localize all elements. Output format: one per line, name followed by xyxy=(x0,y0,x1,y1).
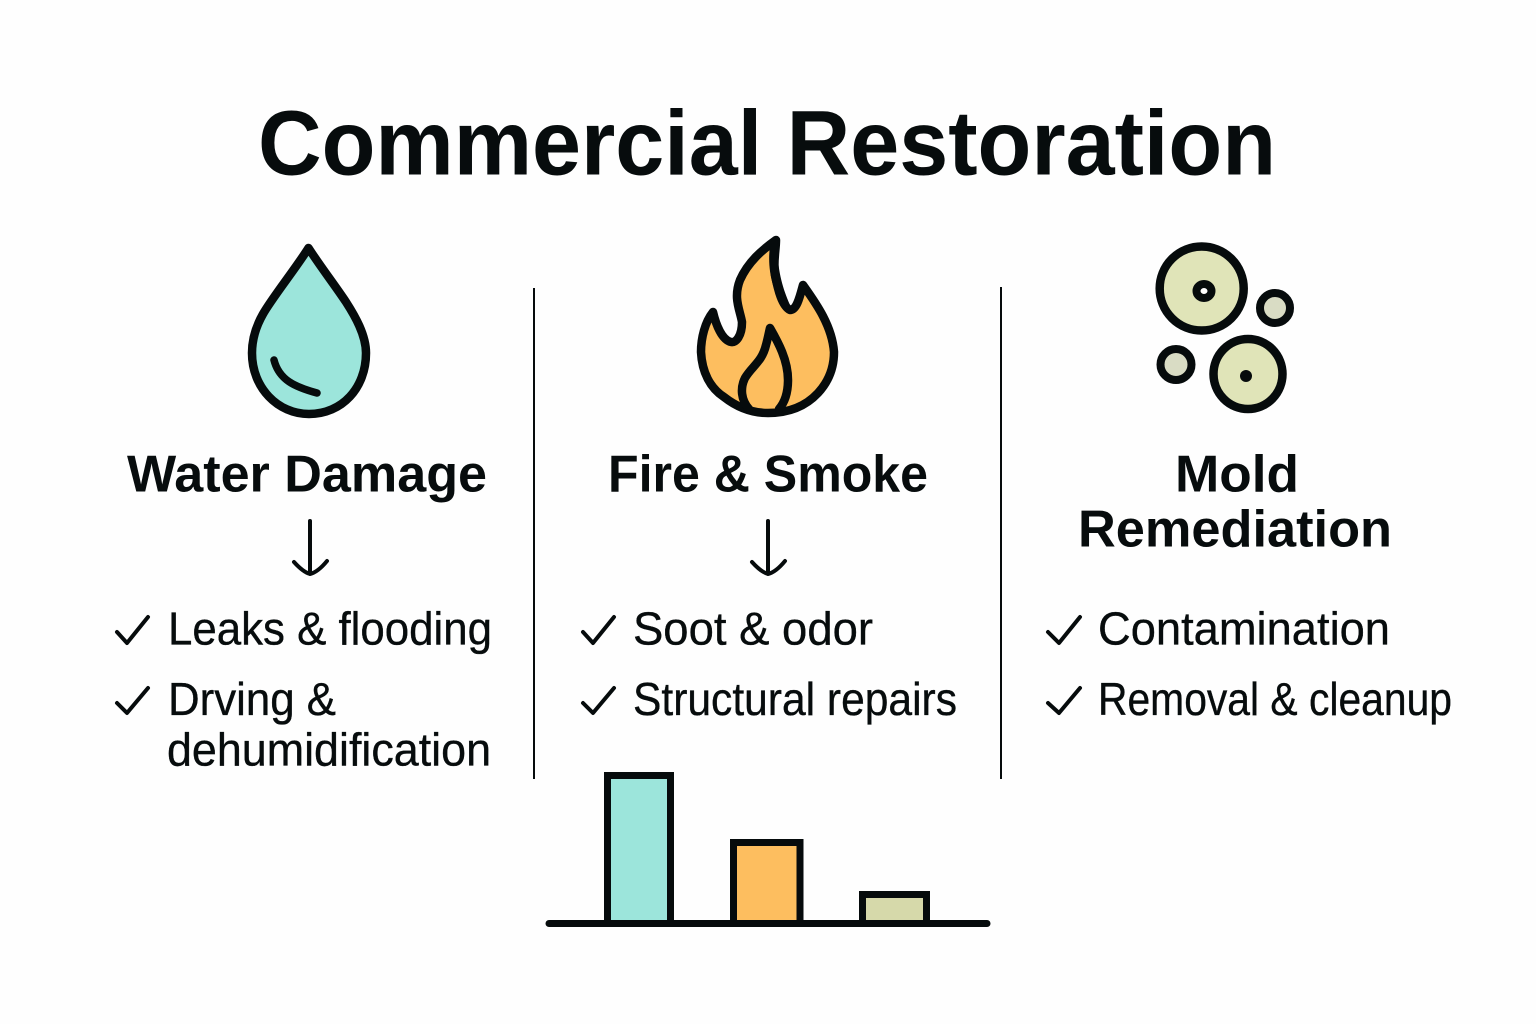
check icon xyxy=(583,688,614,713)
check icon xyxy=(117,617,148,643)
icon: water drop xyxy=(252,248,366,414)
item: removal and cleanup: Removal & cleanup xyxy=(1098,673,1452,725)
check icon xyxy=(1048,688,1080,713)
item: drying and dehumidification: dehumidification xyxy=(167,724,491,776)
icon: flame xyxy=(701,240,834,413)
heading: mold remediation: Mold xyxy=(1175,446,1299,504)
item: drying and dehumidification: Drving & xyxy=(168,673,336,725)
check icon xyxy=(583,617,614,643)
item: soot and odor: Soot & odor xyxy=(633,602,873,654)
icon: mold spores xyxy=(1160,246,1290,409)
check icon xyxy=(117,688,148,713)
bar: water xyxy=(608,776,670,924)
item: structural repairs: Structural repairs xyxy=(633,673,957,725)
panel: mold remediation xyxy=(1048,246,1452,725)
bar: fire xyxy=(734,842,800,924)
item: leaks and flooding: Leaks & flooding xyxy=(168,602,492,654)
arrow: water damage xyxy=(294,521,327,574)
heading: mold remediation xyxy=(1078,446,1392,558)
heading: fire and smoke: Fire & Smoke xyxy=(608,446,928,504)
title: Commercial Restoration xyxy=(258,92,1276,194)
check icon xyxy=(1048,617,1080,643)
item: contamination: Contamination xyxy=(1098,602,1390,654)
arrow: fire and smoke xyxy=(752,521,785,574)
item: drying and dehumidification xyxy=(167,673,491,776)
bar chart xyxy=(549,776,987,924)
panel: fire and smoke xyxy=(583,240,957,725)
heading: mold remediation: Remediation xyxy=(1078,500,1392,558)
heading: water damage: Water Damage xyxy=(127,446,487,504)
panel: water damage xyxy=(117,248,492,776)
bar: mold xyxy=(862,894,926,924)
